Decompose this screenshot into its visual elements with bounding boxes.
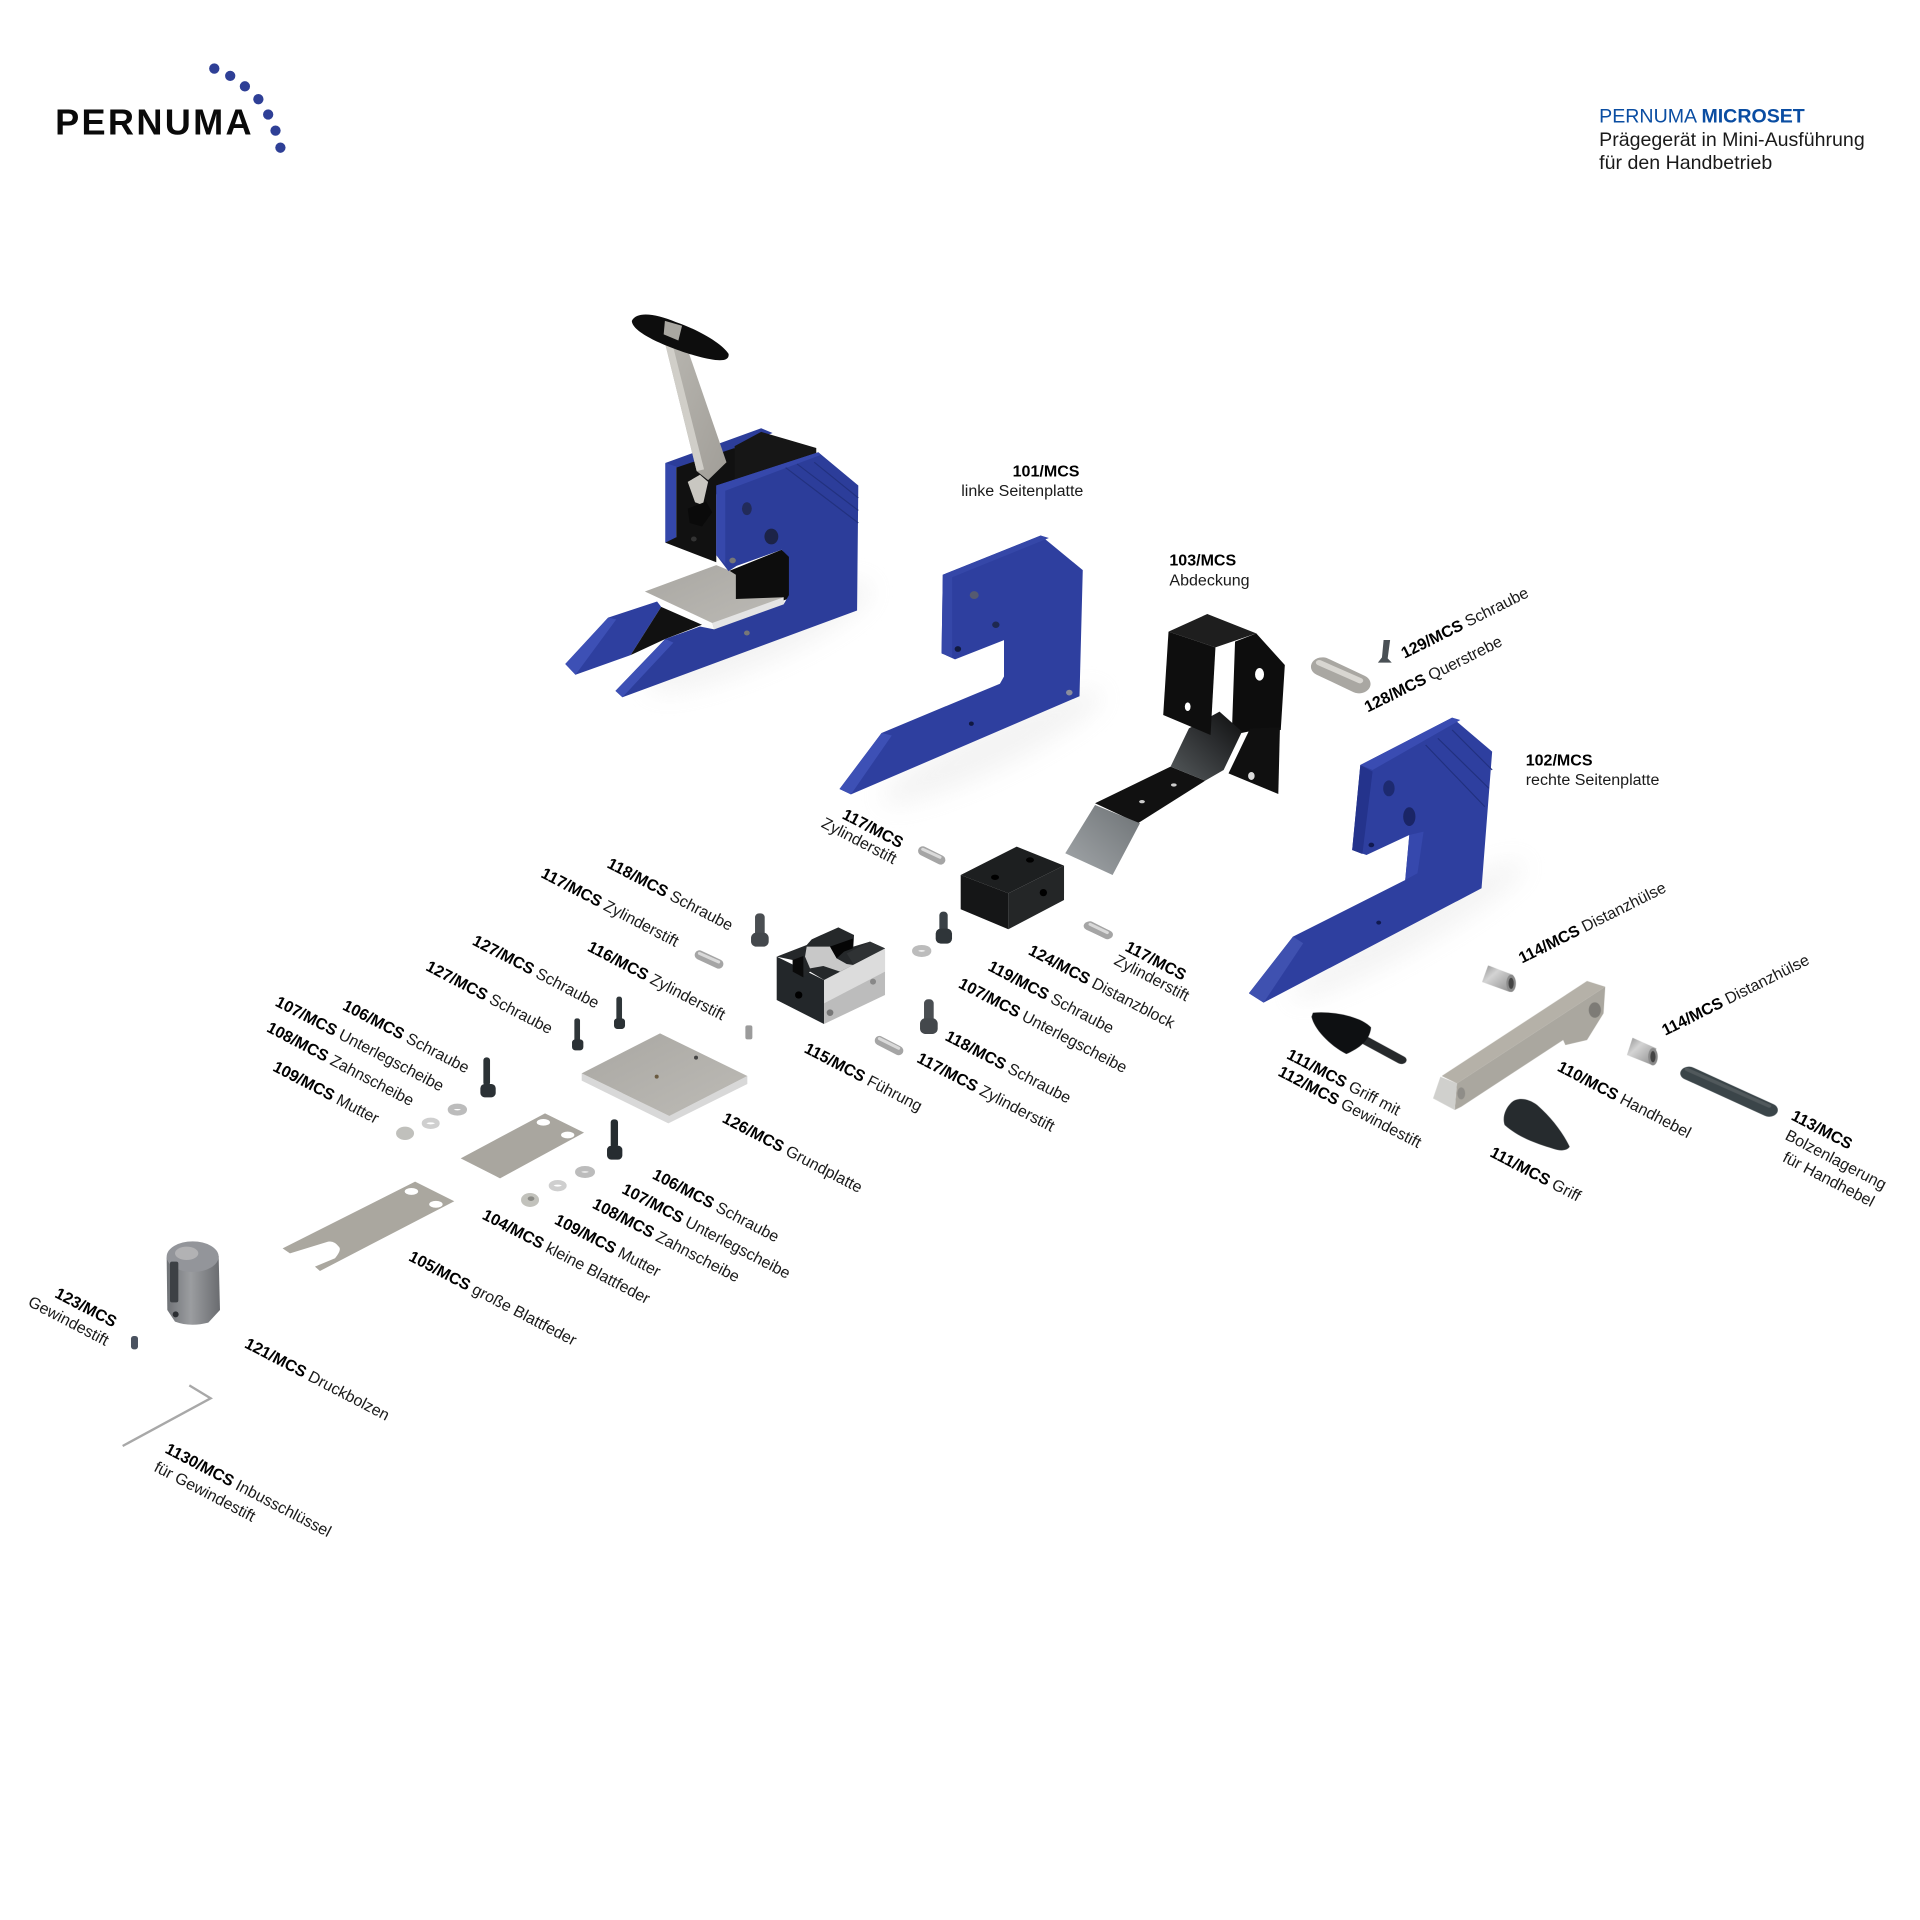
label: 107/MCS Unterlegscheibe: 107/MCS Unterlegscheibe: [272, 993, 447, 1095]
label: 107/MCS Unterlegscheibe: 107/MCS Unterlegscheibe: [956, 975, 1130, 1077]
labels: straight: [961, 462, 1659, 789]
label: 118/MCS Schraube: 118/MCS Schraube: [942, 1027, 1074, 1107]
label: 107/MCS Unterlegscheibe: 107/MCS Unterlegscheibe: [619, 1180, 793, 1283]
part: 114/MCS spacer A: [1482, 965, 1516, 992]
part: 118/MCS screw upper: [751, 913, 769, 947]
part: 117/MCS pin: [1089, 924, 1108, 935]
label: 113/MCS: 113/MCS: [1788, 1107, 1855, 1153]
part: 118/MCS screw lower: [920, 999, 938, 1034]
label: 128/MCS Querstrebe: 128/MCS Querstrebe: [1362, 632, 1505, 716]
label: Gewindestift: Gewindestift: [25, 1293, 112, 1350]
label: 111/MCS Griff mit: 111/MCS Griff mit: [1284, 1046, 1404, 1120]
label: 123/MCS: 123/MCS: [52, 1284, 120, 1331]
label: 105/MCS große Blattfeder: 105/MCS große Blattfeder: [406, 1248, 580, 1350]
base parts: [396, 997, 747, 1207]
label: 117/MCS: 117/MCS: [839, 806, 906, 852]
part: 126/MCS base plate: [582, 1033, 747, 1123]
label: 106/MCS Schraube: 106/MCS Schraube: [340, 997, 472, 1077]
label: 109/MCS Mutter: 109/MCS Mutter: [270, 1058, 382, 1128]
part: 129/MCS screw: [1378, 640, 1392, 663]
lever parts: [1312, 965, 1769, 1150]
part: 104/MCS small leaf spring: [461, 1113, 584, 1178]
label: Zylinderstift: Zylinderstift: [819, 814, 900, 868]
label: 103/MCS: 103/MCS: [1169, 552, 1237, 570]
part: 124/MCS spacer block: [961, 847, 1064, 929]
assembled press and left side plate: [565, 332, 1083, 794]
label: 112/MCS Gewindestift: 112/MCS Gewindestift: [1275, 1063, 1425, 1152]
labels: descending: [25, 806, 1889, 1541]
label: 102/MCS: 102/MCS: [1526, 751, 1593, 769]
guide block and neighbours: [699, 913, 885, 1039]
cover, crossbar and right side plate: [1065, 614, 1492, 1003]
logo dots: [209, 63, 286, 153]
label: 106/MCS Schraube: 106/MCS Schraube: [650, 1166, 782, 1246]
label: 126/MCS Grundplatte: 126/MCS Grundplatte: [719, 1109, 865, 1197]
label: 117/MCS: 117/MCS: [1122, 938, 1189, 984]
label: 110/MCS Handhebel: 110/MCS Handhebel: [1554, 1058, 1694, 1142]
logo wordmark: PERNUMA: [55, 102, 254, 143]
label: 127/MCS Schraube: 127/MCS Schraube: [423, 957, 556, 1038]
title line 3: für den Handbetrieb: [1599, 152, 1772, 174]
part: 1130/MCS hex key: [123, 1385, 211, 1446]
label: für Gewindestift: für Gewindestift: [151, 1458, 259, 1526]
label: 108/MCS Zahnscheibe: 108/MCS Zahnscheibe: [264, 1019, 417, 1110]
assembled press: [565, 332, 858, 697]
part: 111/MCS grip: [1504, 1099, 1570, 1150]
part: 110/MCS hand lever: [1433, 981, 1605, 1110]
part: 123/MCS set screw: [131, 1336, 138, 1349]
part: 106/MCS screw B: [607, 1119, 622, 1160]
part: 117/MCS pin front: [879, 1039, 899, 1051]
label: 127/MCS Schraube: 127/MCS Schraube: [470, 932, 602, 1012]
part: 113/MCS bolt: [1687, 1069, 1769, 1110]
label: Abdeckung: Abdeckung: [1169, 571, 1250, 589]
part: 103/MCS cover: [1065, 614, 1285, 875]
labels: ascending: [1362, 584, 1812, 1039]
part: 108/MCS tooth washer A: [424, 1120, 437, 1127]
label: 116/MCS Zylinderstift: 116/MCS Zylinderstift: [585, 938, 729, 1024]
label: 104/MCS kleine Blattfeder: 104/MCS kleine Blattfeder: [479, 1206, 653, 1308]
part: 105/MCS large leaf spring: [283, 1182, 454, 1271]
part: 107/MCS washer B: [578, 1169, 592, 1175]
center parts: block, pins, screws: [879, 847, 1107, 1051]
label: 111/MCS Griff: 111/MCS Griff: [1487, 1144, 1584, 1206]
label: 114/MCS Distanzhülse upper: 114/MCS Distanzhülse: [1516, 879, 1669, 967]
part: 119/MCS screw: [936, 912, 952, 944]
part: 121/MCS pressure bolt: [167, 1241, 220, 1325]
part: 116/MCS pin: [745, 1025, 752, 1039]
logo: PERNUMA: [55, 63, 286, 153]
soft shadows: [636, 562, 1535, 1015]
label: 114/MCS Distanzhülse lower: 114/MCS Distanzhülse: [1659, 951, 1812, 1039]
part: 107/MCS washer: [915, 948, 929, 954]
label: 101/MCS: 101/MCS: [1013, 462, 1080, 480]
label: 1130/MCS Inbusschlüssel: 1130/MCS Inbusschlüssel: [162, 1440, 334, 1541]
part: 115/MCS guide: [777, 927, 885, 1024]
label: rechte Seitenplatte: rechte Seitenplatte: [1526, 771, 1659, 789]
part: 111/MCS 112/MCS grip with threaded pin: [1312, 1012, 1401, 1060]
label: 117/MCS Zylinderstift: 117/MCS Zylinderstift: [538, 864, 682, 951]
label: Bolzenlagerung: Bolzenlagerung: [1782, 1126, 1889, 1194]
label: 115/MCS Führung: 115/MCS Führung: [801, 1039, 925, 1115]
label: Zylinderstift: Zylinderstift: [1111, 951, 1193, 1005]
title line 1: PERNUMA MICROSET: [1599, 105, 1805, 127]
label: 108/MCS Zahnscheibe: 108/MCS Zahnscheibe: [590, 1195, 743, 1286]
label: 109/MCS Mutter: 109/MCS Mutter: [552, 1211, 664, 1281]
part: 108/MCS tooth washer B: [551, 1182, 564, 1189]
label: linke Seitenplatte: linke Seitenplatte: [961, 482, 1083, 500]
part: 114/MCS spacer B: [1627, 1038, 1658, 1065]
part: 117/MCS pin upper: [923, 849, 941, 860]
part: 109/MCS nut A: [396, 1127, 414, 1140]
small parts bottom left: [123, 1241, 220, 1446]
label: 119/MCS Schraube: 119/MCS Schraube: [985, 957, 1117, 1038]
part: 127/MCS screw B: [572, 1018, 583, 1050]
label: 121/MCS Druckbolzen: 121/MCS Druckbolzen: [242, 1335, 392, 1425]
part: 117/MCS pin lower: [1090, 924, 1107, 935]
title line 2: Prägegerät in Mini-Ausführung: [1599, 129, 1865, 151]
part: press knob: [632, 314, 729, 360]
part: 101/MCS left side plate: [840, 535, 1083, 794]
part: 109/MCS nut B: [521, 1193, 539, 1207]
product title: [1599, 105, 1865, 174]
label: 129/MCS Schraube: 129/MCS Schraube: [1398, 584, 1532, 662]
part: 117/MCS pin left: [699, 953, 719, 964]
label: 117/MCS Zylinderstift: 117/MCS Zylinderstift: [914, 1049, 1058, 1136]
part: 107/MCS washer A: [450, 1106, 464, 1113]
part: 106/MCS screw A: [480, 1057, 496, 1097]
part: 102/MCS right side plate: [1249, 718, 1492, 1003]
part: 128/MCS crossbar: [1319, 663, 1360, 684]
label: 124/MCS Distanzblock: 124/MCS Distanzblock: [1025, 941, 1179, 1033]
label: 118/MCS Schraube: 118/MCS Schraube: [604, 855, 736, 935]
label: für Handhebel: für Handhebel: [1780, 1148, 1877, 1211]
part: 127/MCS screw A: [614, 997, 625, 1029]
